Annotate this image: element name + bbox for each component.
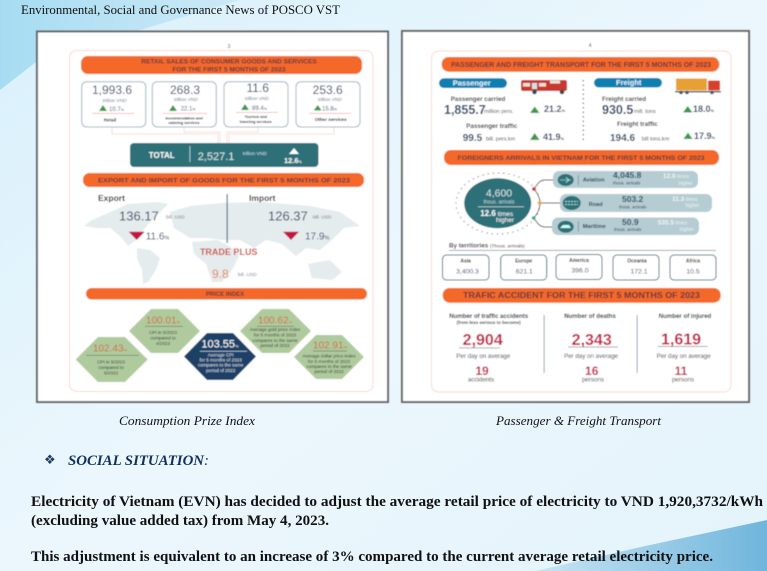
freight section: 17.9% — [694, 131, 716, 141]
export and import values: bill. USD — [238, 272, 257, 278]
heading: price index: PRICE INDEX — [206, 292, 244, 298]
freight section — [594, 78, 716, 144]
hexagon: average CPI: for 5 months of 2023 — [200, 358, 242, 362]
maritime row: higher — [680, 227, 694, 233]
aviation row — [553, 170, 698, 188]
deaths column: 16 — [585, 364, 599, 378]
hexagon: gold price index: 100.62% — [258, 315, 293, 326]
aviation row: 12.6 times — [663, 173, 689, 180]
passenger section: Passenger carried — [451, 96, 505, 103]
deaths column: Number of deaths — [564, 313, 617, 320]
hexagon: dollar price index: Average dollar price index — [302, 354, 356, 359]
deaths column — [564, 313, 619, 384]
passenger section: Passenger — [453, 79, 491, 88]
export and import values: bill. USD — [313, 215, 332, 221]
retail cards: trillion VND — [174, 97, 199, 103]
road row — [560, 194, 712, 212]
retail cards: 15.8% — [322, 106, 337, 112]
passenger section: Passenger traffic — [466, 123, 518, 130]
heading: price index — [86, 288, 367, 300]
panel: transport, arrivals and accidents: 4 — [589, 43, 592, 49]
deaths column: persons — [582, 377, 604, 384]
connectors — [532, 180, 560, 227]
deaths column: Per day on average — [564, 353, 619, 360]
hexagon: gold price index: for 5 months of 2023 — [254, 332, 297, 337]
territories: Europe — [515, 259, 533, 265]
territories: Africa — [686, 259, 700, 265]
arrivals circle: 4,600 — [486, 188, 512, 200]
retail cards: Other services — [315, 117, 347, 122]
maritime row: thous. arrivals — [614, 227, 642, 232]
total bar: trillion VND — [243, 151, 267, 157]
hexagon: gold price index: compares to the same — [252, 338, 298, 343]
total bar: 12.6% — [284, 156, 303, 165]
territories: 10.5 — [686, 268, 700, 275]
maritime row: Maritime — [583, 224, 606, 230]
icon: red bus — [521, 80, 567, 94]
retail cards: trillion VND — [318, 97, 343, 103]
heading: traffic accident: TRAFIC ACCIDENT FOR THE FIRST 5 MONTHS OF 2023 — [463, 291, 701, 300]
hexagon: dollar price index: compares to the same — [306, 364, 352, 369]
hexagon: CPI vs 5/2022: compared to — [98, 365, 124, 370]
retail cards: 89.4% — [252, 106, 267, 112]
retail cards: 1,993.6 — [92, 83, 132, 97]
territories — [442, 243, 716, 280]
aviation row: 4,045.8 — [613, 170, 642, 180]
text block: electricity price: (excluding value added tax) from May 4, 2023. — [31, 513, 329, 529]
maritime row: 50.9 — [622, 217, 639, 227]
page header: Environmental, Social and Governance News of POSCO VST — [21, 3, 341, 17]
hexagon: average CPI — [184, 333, 256, 380]
road row: 11.3 times — [672, 196, 698, 203]
hexagon: gold price index: Average gold price index — [250, 327, 301, 332]
heading: foreigner arrivals: FOREIGNERS ARRIVALS IN VIETNAM FOR THE FIRST 5 MONTHS OF 2023 — [458, 155, 705, 162]
total bar — [130, 143, 318, 167]
territories: 621.1 — [516, 268, 533, 275]
hexagon: average CPI: period of 2022 — [206, 368, 236, 373]
road row: 503.2 — [622, 194, 644, 204]
hexagon: CPI vs 4/2023: 4/2023 — [156, 341, 170, 346]
hexagon: dollar price index: for 5 months of 2023 — [308, 359, 351, 364]
territories: 3,400.3 — [456, 268, 479, 275]
heading: transport: PASSENGER AND FREIGHT TRANSPORT FOR THE FIRST 5 MONTHS OF 2023 — [451, 62, 711, 69]
panel: transport, arrivals and accidents — [402, 31, 749, 402]
hexagon: CPI vs 4/2023 — [129, 309, 200, 353]
retail cards: traveling services — [240, 120, 272, 124]
passenger section: million pers. — [484, 109, 514, 115]
export and import values: 9.8 — [212, 267, 229, 281]
caption: consumption: Consumption Prize Index — [119, 413, 255, 428]
road row: thous. arrivals — [619, 204, 647, 209]
passenger section: 21.2% — [544, 104, 566, 114]
heading: foreigner arrivals — [444, 150, 719, 165]
road row: Road — [589, 202, 603, 208]
passenger section: bill. pers.km — [486, 136, 516, 142]
passenger section: 99.5 — [463, 133, 483, 144]
accidents column: (from less serious to become) — [457, 320, 521, 325]
freight section: Freight — [616, 78, 642, 87]
panel: consumption and price index: 3 — [228, 44, 231, 50]
territories: By territories (Thous. arrivals) — [449, 243, 525, 250]
hexagon: gold price index: period of 2022 — [260, 343, 290, 348]
export and import values: 136.17 — [119, 209, 159, 224]
export and import values — [98, 193, 332, 281]
passenger section: 1,855.7 — [444, 103, 486, 117]
heading: export and import — [83, 173, 364, 187]
hexagon: CPI vs 5/2022: 102.43% — [93, 344, 128, 355]
retail cards — [82, 81, 360, 143]
hexagon: dollar price index: 102.91% — [313, 340, 348, 351]
section heading: social situation: ❖ — [44, 452, 56, 467]
freight section: 18.0% — [693, 104, 715, 114]
hexagon: CPI vs 5/2022 — [76, 337, 148, 382]
arrivals circle — [456, 173, 540, 234]
aviation row: higher — [679, 181, 693, 187]
hexagon: CPI vs 4/2023: CPI in 5/2023 — [149, 330, 177, 335]
freight section: bill tons.km — [642, 136, 670, 142]
export and import values: TRADE PLUS — [200, 247, 257, 257]
freight section: 194.6 — [610, 133, 635, 144]
icon: truck — [675, 78, 721, 94]
heading: export and import: EXPORT AND IMPORT OF GOODS FOR THE FIRST 5 MONTHS OF 2023 — [98, 178, 350, 185]
freight section: Freight carried — [602, 96, 646, 103]
retail cards: 268.3 — [170, 83, 200, 97]
world map — [84, 202, 360, 284]
accidents column: Number of traffic accidents — [449, 313, 529, 320]
heading: retail sales — [81, 56, 362, 74]
maritime row: 535.5 times — [658, 219, 688, 226]
text block: electricity price — [31, 494, 764, 565]
export and import values: 11.6% — [146, 231, 169, 242]
territories: Asia — [460, 259, 471, 265]
hexagon: dollar price index: period of 2022 — [314, 369, 344, 374]
aviation row: thous. arrivals — [613, 180, 641, 185]
territories: 172.1 — [630, 268, 648, 275]
territories: Oceania — [627, 259, 647, 265]
export and import values: 126.37 — [268, 209, 308, 224]
heading: retail sales: RETAIL SALES OF CONSUMER GOODS AND SERVICES — [141, 58, 317, 66]
injured column: 1,619 — [661, 332, 701, 348]
accidents column — [449, 313, 529, 384]
injured column: 11 — [675, 364, 688, 378]
total bar: 2,527.1 — [198, 151, 234, 163]
freight section: Freight traffic — [617, 121, 658, 128]
freight section: mill. tons — [634, 109, 656, 115]
retail cards: Tourism and — [244, 115, 268, 119]
arrivals circle: higher — [496, 217, 515, 224]
hexagon: average CPI: Average CPI — [208, 353, 234, 358]
accidents column: 2,904 — [463, 332, 503, 349]
text block: electricity price: This adjustment is equivalent to an increase of 3% compared to the current average retail electricity price. — [31, 549, 713, 565]
retail cards: catering services — [168, 121, 200, 125]
arrivals circle: 12.6 times — [480, 209, 514, 218]
export and import values: Import — [249, 193, 276, 203]
retail cards: 10.7% — [109, 107, 124, 113]
heading: retail sales: FOR THE FIRST 5 MONTHS OF 2023 — [172, 66, 286, 74]
accidents column: accidents — [468, 377, 494, 384]
injured column — [657, 313, 712, 384]
accidents column: 19 — [475, 364, 489, 378]
road row: higher — [685, 203, 700, 209]
territories: America — [569, 258, 589, 264]
hexagon: gold price index — [240, 309, 311, 353]
passenger section: 41.9% — [543, 132, 565, 142]
caption: transport: Passenger & Freight Transport — [495, 413, 661, 428]
territories: 396.0 — [571, 268, 589, 275]
arrivals circle: thous. arrivals — [483, 199, 515, 205]
freight section: 930.5 — [602, 103, 633, 117]
heading: transport — [442, 57, 719, 72]
retail cards: Retail — [104, 118, 116, 123]
section heading: social situation: SOCIAL SITUATION: — [68, 453, 209, 469]
hexagon: average CPI: compares to the same — [198, 362, 244, 368]
hexagon: CPI vs 5/2022: 5/2022 — [104, 370, 118, 375]
passenger section — [439, 78, 566, 144]
hexagon: dollar price index — [294, 335, 364, 379]
injured column: Number of injured — [659, 313, 712, 320]
maritime row — [552, 217, 699, 235]
hexagon: average CPI: 103.55% — [201, 338, 239, 350]
dotted divider — [582, 80, 584, 143]
deaths column: 2,343 — [572, 332, 612, 349]
export and import values: Export — [98, 193, 125, 203]
hexagon: CPI vs 5/2022: CPI in 5/2023 — [97, 360, 125, 365]
injured column: persons — [672, 377, 694, 384]
retail cards: trillion VND — [245, 96, 270, 102]
accidents column: Per day on average — [456, 353, 511, 360]
hexagon: CPI vs 4/2023: compared to — [150, 336, 176, 340]
hexagon: CPI vs 4/2023: 100.01% — [146, 315, 181, 326]
aviation row: Aviation — [583, 178, 605, 184]
heading: traffic accident — [443, 288, 721, 303]
retail cards: Accommodation and — [165, 117, 203, 121]
retail cards: trillion VND — [103, 98, 127, 104]
export and import values: bill. USD — [166, 215, 185, 221]
retail cards: 253.6 — [313, 83, 343, 97]
retail cards: 11.6 — [246, 81, 269, 95]
retail cards: 22.1% — [181, 106, 196, 112]
total bar: TOTAL — [149, 151, 175, 160]
text block: electricity price: Electricity of Vietnam (EVN) has decided to adjust the average retail price of electricity to VND 1,920,3732/kWh — [31, 494, 764, 510]
export and import values: 17.9% — [305, 231, 329, 242]
panel: consumption and price index — [37, 32, 388, 402]
injured column: Per day on average — [657, 353, 711, 360]
